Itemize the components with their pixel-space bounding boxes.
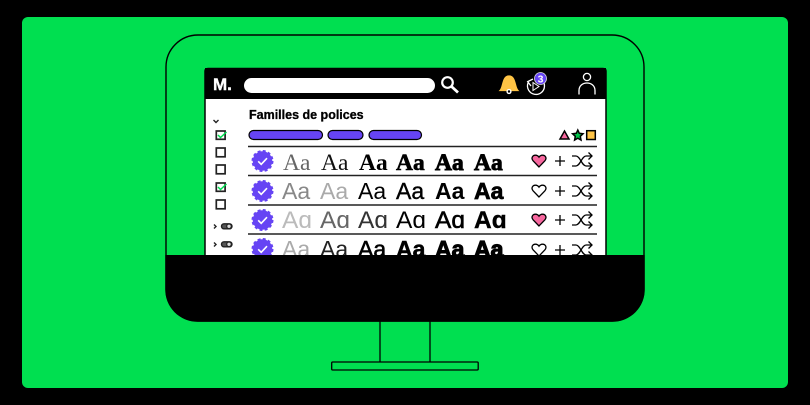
row dividers: [248, 146, 597, 234]
row 1: Aa: [359, 150, 388, 176]
row 4: Aa: [320, 236, 348, 262]
icon: replay with badge: 3: [538, 74, 544, 86]
sidebar filters: [214, 120, 232, 247]
icon: user: [579, 73, 595, 94]
row 3: [252, 209, 593, 231]
row 1: Aa: [435, 150, 464, 176]
row 4: Aa: [396, 236, 426, 262]
screen: [204, 68, 607, 262]
icon: replay with badge: [527, 72, 546, 94]
row 2: Aa: [435, 178, 465, 204]
monitor stand: [332, 321, 478, 370]
row 3: Aɑ: [320, 207, 350, 234]
row 3: Aɑ: [282, 207, 312, 234]
row 1: Aa: [396, 150, 425, 176]
row 1: [252, 150, 593, 172]
screen frame: [205, 68, 606, 255]
row 2: [252, 180, 593, 202]
icon: bell: [500, 76, 518, 94]
row 2: Aa: [320, 178, 348, 204]
row 4: Aa: [435, 236, 465, 262]
row 3: Aɑ: [435, 207, 465, 234]
row 3: Aɑ: [358, 207, 388, 234]
row 1: Aa: [283, 150, 311, 176]
row 2: Aa: [396, 178, 424, 204]
row 2: Aa: [358, 178, 386, 204]
row 4: [252, 238, 593, 255]
logo: M.: [213, 75, 232, 94]
header bar: [204, 68, 607, 99]
search field: [244, 78, 435, 93]
row 3: Aɑ: [474, 207, 507, 234]
row 1: Aa: [474, 150, 503, 176]
row 4: Aa: [358, 236, 386, 262]
row 4: Aa: [282, 236, 310, 262]
purple filter pills: [249, 130, 422, 140]
icon: search: [442, 77, 458, 92]
row 1: Aa: [321, 150, 349, 176]
shape icons: [560, 130, 595, 140]
row 3: Aɑ: [396, 207, 426, 234]
heading: Familles de polices: [249, 108, 364, 122]
row 2: Aa: [474, 178, 504, 204]
monitor body: [165, 35, 645, 322]
row 2: Aa: [282, 178, 310, 204]
row 4: Aa: [474, 236, 504, 262]
